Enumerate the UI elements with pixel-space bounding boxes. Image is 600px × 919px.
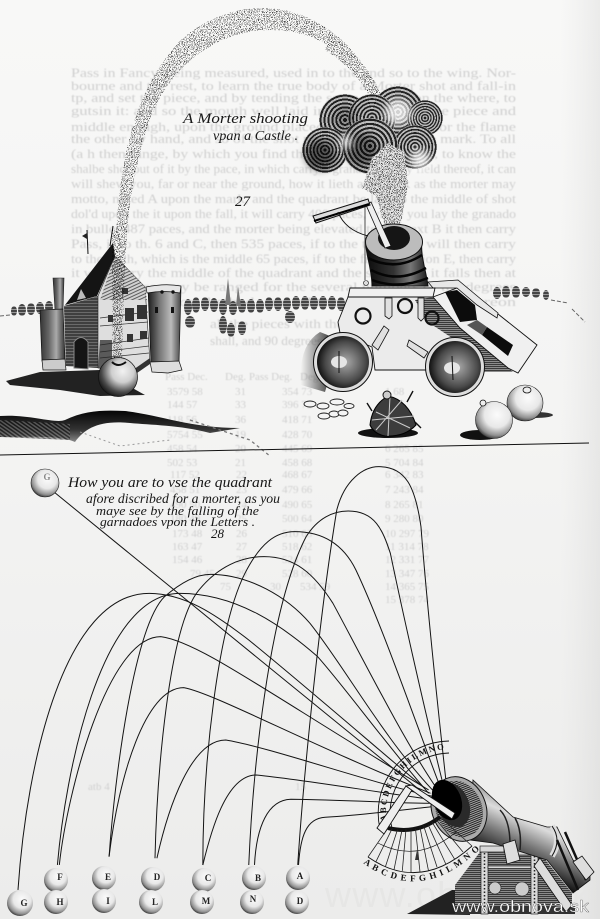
ball G: G bbox=[20, 898, 28, 908]
ball D: D bbox=[154, 872, 161, 882]
upper quadrant letter scale: A B C D E F G H I L M N O bbox=[380, 744, 444, 820]
ball E: E bbox=[105, 872, 111, 882]
bleed-through text from the reverse page: middle enough, upon the ground placed and the bedding for the flame bbox=[71, 119, 516, 134]
bleed-through text from the reverse page: dol'd upon the it upon the fall, it will carry 400 paces, where you lay the granado bbox=[71, 206, 516, 221]
bleed-through number table: 13 347 76 bbox=[385, 568, 430, 580]
ball M bbox=[190, 890, 214, 914]
watermark large faint: www.obnova.sk bbox=[324, 874, 591, 915]
castle left wall and door bbox=[64, 296, 98, 369]
bleed-through number table: 117 52 bbox=[170, 469, 200, 481]
mortar mouth bbox=[366, 224, 422, 260]
bleed-through number table: 154 46 bbox=[172, 554, 203, 566]
bleed-through number table: 23 bbox=[236, 484, 248, 496]
bleed-through text from the reverse page: the other by hand, and so of the shot placed right upon the mark. To all bbox=[71, 131, 516, 146]
bleed-through number table: 25 bbox=[236, 513, 248, 525]
cannon muzzle bbox=[422, 768, 496, 850]
bleed-through number table: 15 bbox=[295, 781, 306, 793]
ball G bbox=[7, 890, 33, 916]
ball G at the top of the diagram bbox=[31, 469, 59, 497]
bleed-through number table: 27 bbox=[236, 541, 248, 553]
castle ground shadow bbox=[6, 370, 145, 396]
bleed-through number table: 22 bbox=[236, 469, 247, 481]
bleed-through number table: 36 bbox=[235, 414, 246, 426]
bleed-through text from the reverse page: will shew you, far or near the ground, how it lieth and mark as the morter may bbox=[71, 176, 517, 191]
bleed-through number table: Pass Dec. bbox=[165, 371, 208, 383]
bleed-through text from the reverse page: tp, and set the piece, and by tending the same, note upon the where, to bbox=[71, 90, 516, 105]
castle flag bbox=[82, 226, 113, 254]
bleed-through number table: 7 243 84 bbox=[385, 484, 424, 496]
ball L: L bbox=[152, 897, 158, 907]
ball F bbox=[44, 868, 68, 892]
title: A Morter shooting vpan a Castle: vpan a Castle . bbox=[213, 129, 298, 144]
bleed-through number table: 118 56 bbox=[167, 414, 197, 426]
bleed-through number table: 31 bbox=[235, 386, 246, 398]
ball G at the top of the diagram: G bbox=[43, 472, 51, 482]
bleed-through text from the reverse page: the piece upon the bed, and all the degrees marked thereon bbox=[92, 294, 517, 309]
bleed-through text from the reverse page: shall, and 90 degrees, and so on bbox=[210, 333, 381, 348]
loose grenades bbox=[460, 385, 553, 440]
bleed-through number table: 173 48 bbox=[172, 528, 203, 540]
gun carriage bbox=[407, 846, 575, 915]
ball M: M bbox=[202, 896, 211, 906]
grenade with net bbox=[358, 391, 421, 438]
mortar bands bbox=[368, 255, 428, 285]
ball H bbox=[44, 890, 68, 914]
lower quadrant fan bbox=[363, 815, 478, 882]
bleed-through number table: 9 280 80 bbox=[385, 513, 424, 525]
carriage left wheel bbox=[314, 332, 372, 392]
carriage flower ornaments bbox=[489, 882, 529, 896]
bleed-through text from the reverse page: Pass, if to th. 6 and C, then 535 paces, if to the third D, it will then carry bbox=[71, 236, 517, 251]
bleed-through number table: 28 bbox=[236, 554, 248, 566]
scattered pebbles bbox=[304, 399, 354, 419]
bleed-through text from the reverse page: motto, noted A upon the mark, and the quadrant be laid to the middle of shot bbox=[71, 191, 516, 206]
bleed-through number table: 524 61 bbox=[282, 554, 312, 566]
title: A Morter shooting vpan a Castle: A Morter shooting bbox=[182, 111, 309, 127]
gunner's quadrant on mortar bbox=[313, 199, 391, 286]
bleed-through number table: 8 265 81 bbox=[385, 499, 424, 511]
castle bbox=[6, 226, 182, 396]
bleed-through number table: Deg. Pass Deg. bbox=[225, 371, 292, 383]
section divider rule bbox=[0, 443, 589, 455]
caption: How you are to vse the quadrant bbox=[67, 475, 280, 529]
ball I bbox=[92, 889, 116, 913]
caption: How you are to vse the quadrant: garnadoes vpon the Letters . bbox=[100, 514, 255, 529]
lettered balls bbox=[7, 866, 310, 916]
bleed-through number table: 534 59 bbox=[300, 581, 331, 593]
bleed-through number table: 1 68 bbox=[385, 386, 405, 398]
title: A Morter shooting vpan a Castle bbox=[182, 111, 309, 144]
caption: How you are to vse the quadrant: afore discribed for a morter, as you bbox=[86, 492, 280, 507]
bleed-through number table: 163 47 bbox=[172, 541, 203, 553]
bleed-through text from the reverse page: gutsin it: and so the mouth well laid in the body upon the piece and bbox=[71, 103, 517, 118]
bleed-through number table: 144 57 bbox=[167, 399, 198, 411]
castle right tower bbox=[146, 285, 182, 373]
cannon breech studs bbox=[573, 856, 594, 880]
caption: How you are to vse the quadrant: How you are to vse the quadrant bbox=[67, 475, 273, 491]
lower quadrant fan: A B C D E F G H I L M N O bbox=[363, 846, 478, 882]
bleed-through number table: 11 314 78 bbox=[385, 541, 429, 553]
carriage rings and straps bbox=[356, 298, 438, 358]
bleed-through number table: 3 95 bbox=[385, 399, 405, 411]
cannon trunnion bbox=[503, 840, 520, 864]
bleed-through number table: 14 365 75 bbox=[385, 581, 430, 593]
bleed-through number table: 6 342 83 bbox=[385, 469, 424, 481]
cannon barrel bbox=[470, 780, 594, 912]
bleed-through number table: 19 bbox=[235, 429, 246, 441]
ball E bbox=[92, 866, 116, 890]
bleed-through number table: 30 bbox=[270, 581, 282, 593]
bleed-through number table: 12 331 77 bbox=[385, 554, 430, 566]
ball C: C bbox=[205, 873, 211, 883]
bleed-through number table: 180 49 bbox=[170, 513, 201, 525]
ball I: I bbox=[106, 896, 110, 906]
bleed-through number table: 4 205 bbox=[385, 429, 410, 441]
ball N bbox=[240, 890, 264, 914]
smoke cloud from the mortar bbox=[302, 86, 443, 228]
bleed-through number table: 458 68 bbox=[282, 457, 313, 469]
ball N: N bbox=[250, 894, 257, 904]
carriage body bbox=[455, 852, 572, 914]
bleed-through number table: 6 265 85 bbox=[385, 443, 424, 455]
ball L bbox=[139, 890, 163, 914]
carriage rear ramp bbox=[428, 280, 537, 373]
bleed-through number table: 468 67 bbox=[282, 469, 313, 481]
plate number 28: 28 bbox=[211, 526, 224, 541]
carriage wheel shadows bbox=[301, 332, 340, 392]
mortar bbox=[313, 199, 428, 286]
bleed-through number table: 428 70 bbox=[282, 429, 313, 441]
stippled shell trajectory arch bbox=[112, 8, 385, 368]
quadrant bar in the muzzle bbox=[377, 785, 455, 834]
trajectories from the cannon to the balls bbox=[18, 467, 446, 890]
mortar carriage bbox=[301, 280, 537, 396]
bleed-through number table: 528 60 bbox=[282, 568, 313, 580]
bleed-through number table: 5754 55 bbox=[167, 429, 203, 441]
bleed-through text from the reverse page: Pass in Fancy, being measured, used in to the and so to the wing. Nor- bbox=[71, 65, 516, 80]
bleed-through number table: 3579 58 bbox=[167, 386, 203, 398]
bleed-through number table: 479 66 bbox=[282, 484, 313, 496]
ball A: A bbox=[297, 871, 304, 881]
bleed-through number table: 26 bbox=[236, 528, 248, 540]
bleed-through number table: 458 51 bbox=[170, 484, 200, 496]
ball A bbox=[286, 866, 310, 890]
bleed-through number table: 5 704 84 bbox=[385, 457, 424, 469]
bleed-through number table: 354 73 bbox=[282, 386, 313, 398]
bleed-through number table: 510 63 bbox=[282, 528, 313, 540]
ball C bbox=[192, 868, 216, 892]
ball D lower: D bbox=[297, 896, 304, 906]
bleed-through text from the reverse page: all the pieces with their number of bbox=[210, 316, 421, 331]
bleed-through number table: 490 65 bbox=[282, 499, 313, 511]
bleed-through number table bbox=[88, 371, 430, 793]
bleed-through number table: 490 50 bbox=[170, 499, 201, 511]
bleed-through number table: 458 54 bbox=[167, 443, 198, 455]
ball B: B bbox=[255, 873, 261, 883]
bleed-through number table: 20 bbox=[235, 443, 246, 455]
bleed-through number table: 445 69 bbox=[282, 443, 313, 455]
ball B bbox=[242, 866, 266, 890]
ball H: H bbox=[56, 897, 64, 907]
bleed-through number table: 79 45 bbox=[190, 568, 215, 580]
hill in the foreground bbox=[0, 411, 270, 456]
castle right wall with windows bbox=[98, 256, 150, 373]
watermark www.obnova.sk: www.obnova.sk bbox=[451, 897, 590, 916]
bleed-through number table: 3 162 bbox=[385, 414, 410, 426]
bleed-through number table: 518 62 bbox=[282, 541, 312, 553]
bleed-through text from the reverse page: (a h then range, by which you find the range of the morter, to know the bbox=[71, 146, 516, 161]
bleed-through number table: 21 bbox=[235, 457, 246, 469]
bleed-through number table: Deg. Pass Dec. bbox=[300, 371, 367, 383]
carriage right wheel bbox=[426, 338, 484, 396]
carriage top plate bbox=[348, 288, 435, 297]
bleed-through number table: 24 bbox=[236, 499, 248, 511]
bleed-through text from the reverse page: in bullet 487 paces, and the morter being elevated to the next B it then carry bbox=[71, 221, 517, 236]
bleed-through text from the reverse page: The piece may be ranged for the several numbers of the degrees bbox=[92, 279, 516, 294]
carriage cheek bbox=[338, 297, 460, 370]
bleed-through text from the reverse page bbox=[71, 65, 517, 348]
ground shadow bbox=[407, 890, 470, 915]
cannon curved strap bbox=[534, 858, 572, 912]
horizon tree line bbox=[0, 278, 585, 337]
bleed-through number table: 15 378 74 bbox=[385, 594, 430, 606]
carriage iron straps bbox=[480, 846, 542, 914]
bleed-through number table: 33 bbox=[235, 399, 246, 411]
bleed-through number table: 418 71 bbox=[282, 414, 312, 426]
caption: How you are to vse the quadrant: maye see by the falling of the bbox=[96, 503, 259, 518]
bleed-through number table: 502 53 bbox=[167, 457, 198, 469]
ball D bbox=[141, 867, 165, 891]
ball F: F bbox=[57, 872, 63, 882]
bleed-through text from the reverse page: shalbe shot out of it by the pace, in which carry a granado, at any field thereof, it can bbox=[71, 161, 516, 176]
bleed-through number table: 10 297 79 bbox=[385, 528, 430, 540]
bleed-through number table: 75 bbox=[220, 581, 232, 593]
castle roof bbox=[65, 243, 115, 305]
bleed-through number table: atb 4 bbox=[88, 781, 110, 793]
bleed-through number table: 396 72 bbox=[282, 399, 312, 411]
bleed-through text from the reverse page: to the sixth, which is the middle 65 paces, if to the fifth elevation E, then carry bbox=[71, 251, 517, 266]
mortar barrel bbox=[366, 240, 428, 286]
bleed-through text from the reverse page: it will carry the middle of the quadrant and the shot upon it falls then at bbox=[71, 265, 516, 280]
castle left tower and chimney bbox=[40, 278, 66, 370]
ball D lower bbox=[285, 890, 309, 914]
plate number 27: 27 bbox=[235, 194, 252, 210]
bleed-through number table: 29 bbox=[236, 568, 248, 580]
bleed-through text from the reverse page: bourne and the rest, to learn the true body of a Morter shot and fall-in bbox=[71, 78, 517, 93]
bleed-through number table: 500 64 bbox=[282, 513, 313, 525]
bomb landing on the castle bbox=[98, 358, 138, 396]
